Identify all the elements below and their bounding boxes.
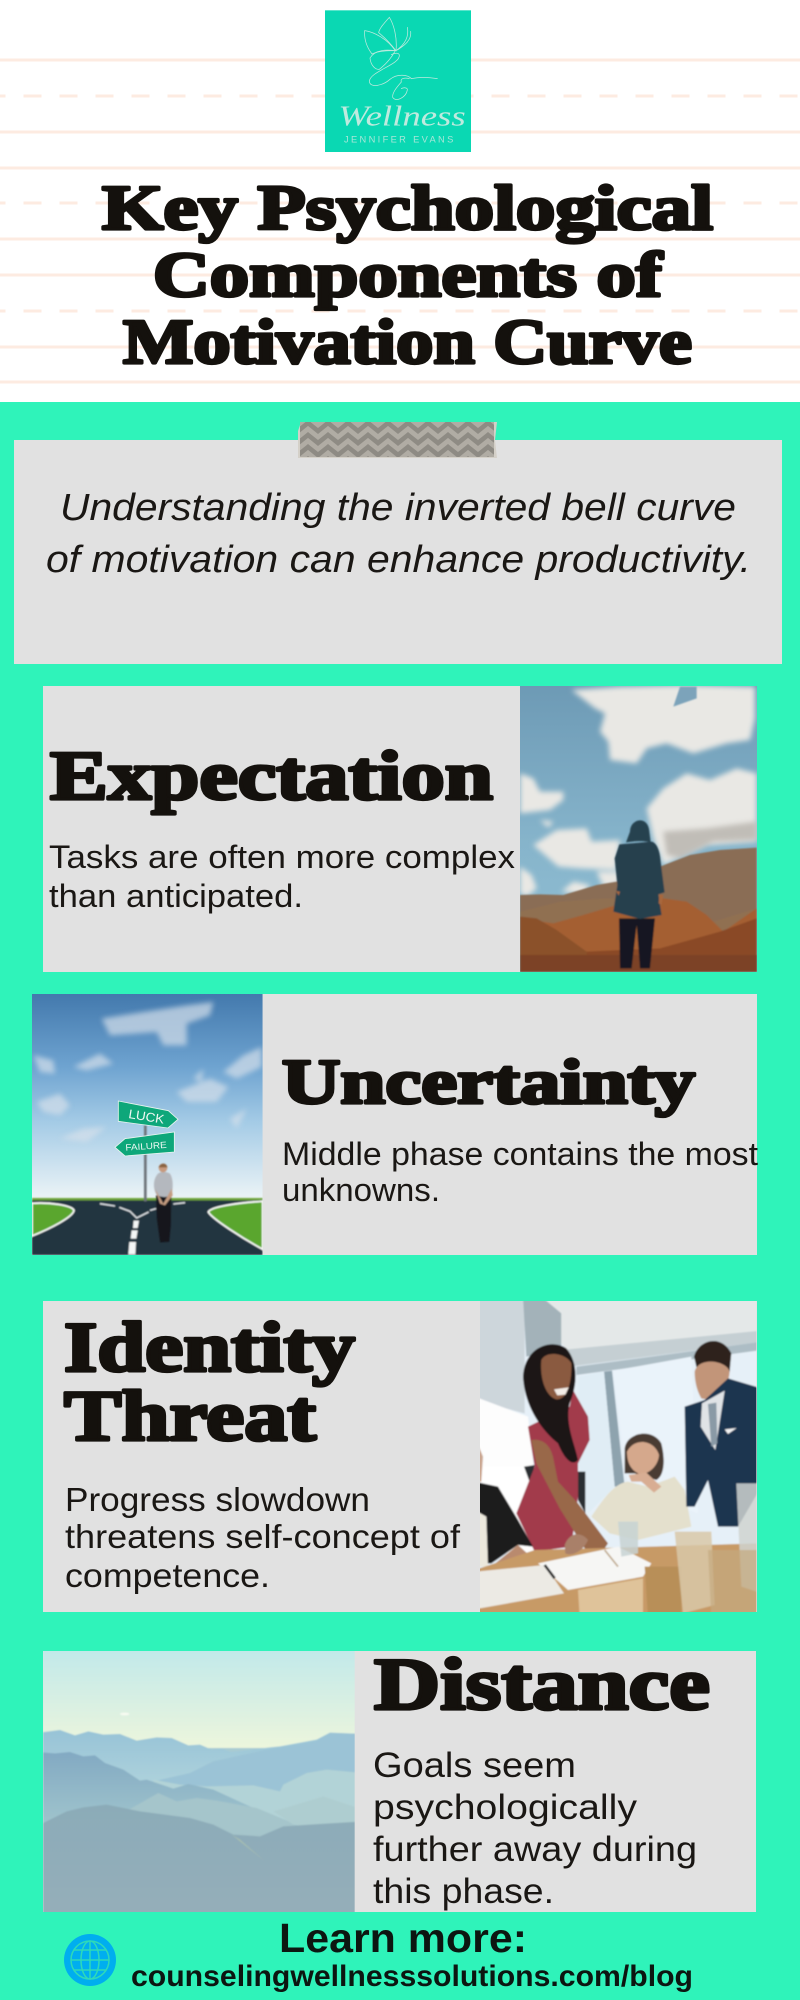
- photo: misty mountain ranges: [37, 1645, 363, 1918]
- washi tape: [298, 422, 497, 458]
- heading: Expectation: Expectation: [50, 738, 493, 815]
- footer: learn more: [64, 1915, 693, 1993]
- title: [102, 172, 713, 377]
- heading: Identity Threat: Threat: [64, 1376, 316, 1456]
- panel: intro note: [14, 422, 782, 664]
- background: white header with ruled lines: [0, 0, 800, 402]
- panel: Distance: [37, 1644, 756, 1918]
- heading: Distance: Distance: [374, 1644, 710, 1726]
- body: Uncertainty: Middle phase contains the most: [282, 1136, 758, 1172]
- body: Expectation: Tasks are often more complex: [49, 839, 515, 875]
- body: Identity Threat: threatens self-concept of: [65, 1518, 461, 1555]
- logo wordmark: Wellness: [338, 101, 466, 132]
- logo: E Wellness Jennifer Evans: [325, 10, 471, 152]
- body: Distance: further away during: [373, 1830, 697, 1869]
- panel: Uncertainty: [32, 994, 767, 1255]
- body: Distance: Goals seem: [373, 1746, 576, 1785]
- intro text: of motivation can enhance productivity.: [46, 539, 751, 581]
- panel: Expectation: [43, 685, 757, 972]
- photo: colleagues reviewing papers at a meeting table: [475, 1297, 761, 1617]
- body: Identity Threat: Progress slowdown: [65, 1481, 370, 1518]
- intro text: Understanding the inverted bell curve: [60, 487, 736, 529]
- heading: Uncertainty: Uncertainty: [282, 1046, 695, 1117]
- logo name: JENNIFER EVANS: [344, 135, 453, 145]
- body: Uncertainty: unknowns.: [282, 1172, 440, 1208]
- sign text: luck: LUCK: [128, 1107, 166, 1127]
- body: Identity Threat: competence.: [65, 1557, 270, 1594]
- heading: Identity Threat: Identity: [64, 1309, 355, 1387]
- body: Distance: this phase.: [373, 1872, 554, 1911]
- body: Expectation: than anticipated.: [49, 878, 303, 914]
- sign text: failure: FAILURE: [125, 1140, 167, 1153]
- body: Distance: psychologically: [373, 1788, 638, 1827]
- photo: person facing mountains under cloudy sky: [520, 685, 757, 972]
- title: Key Psychological: [102, 172, 713, 243]
- website url: counselingwellnesssolutions.com/blog: [131, 1960, 693, 1993]
- call to action heading: Learn more:: [279, 1915, 527, 1961]
- photo: crossroads with luck and failure signs: [32, 994, 263, 1255]
- icon: globe: [64, 1934, 116, 1986]
- title: Components of: [153, 239, 663, 310]
- title: Motivation Curve: [123, 306, 692, 377]
- heading: Identity Threat: [64, 1309, 355, 1456]
- background: green body: [0, 402, 800, 2000]
- panel: Identity Threat: [43, 1297, 761, 1617]
